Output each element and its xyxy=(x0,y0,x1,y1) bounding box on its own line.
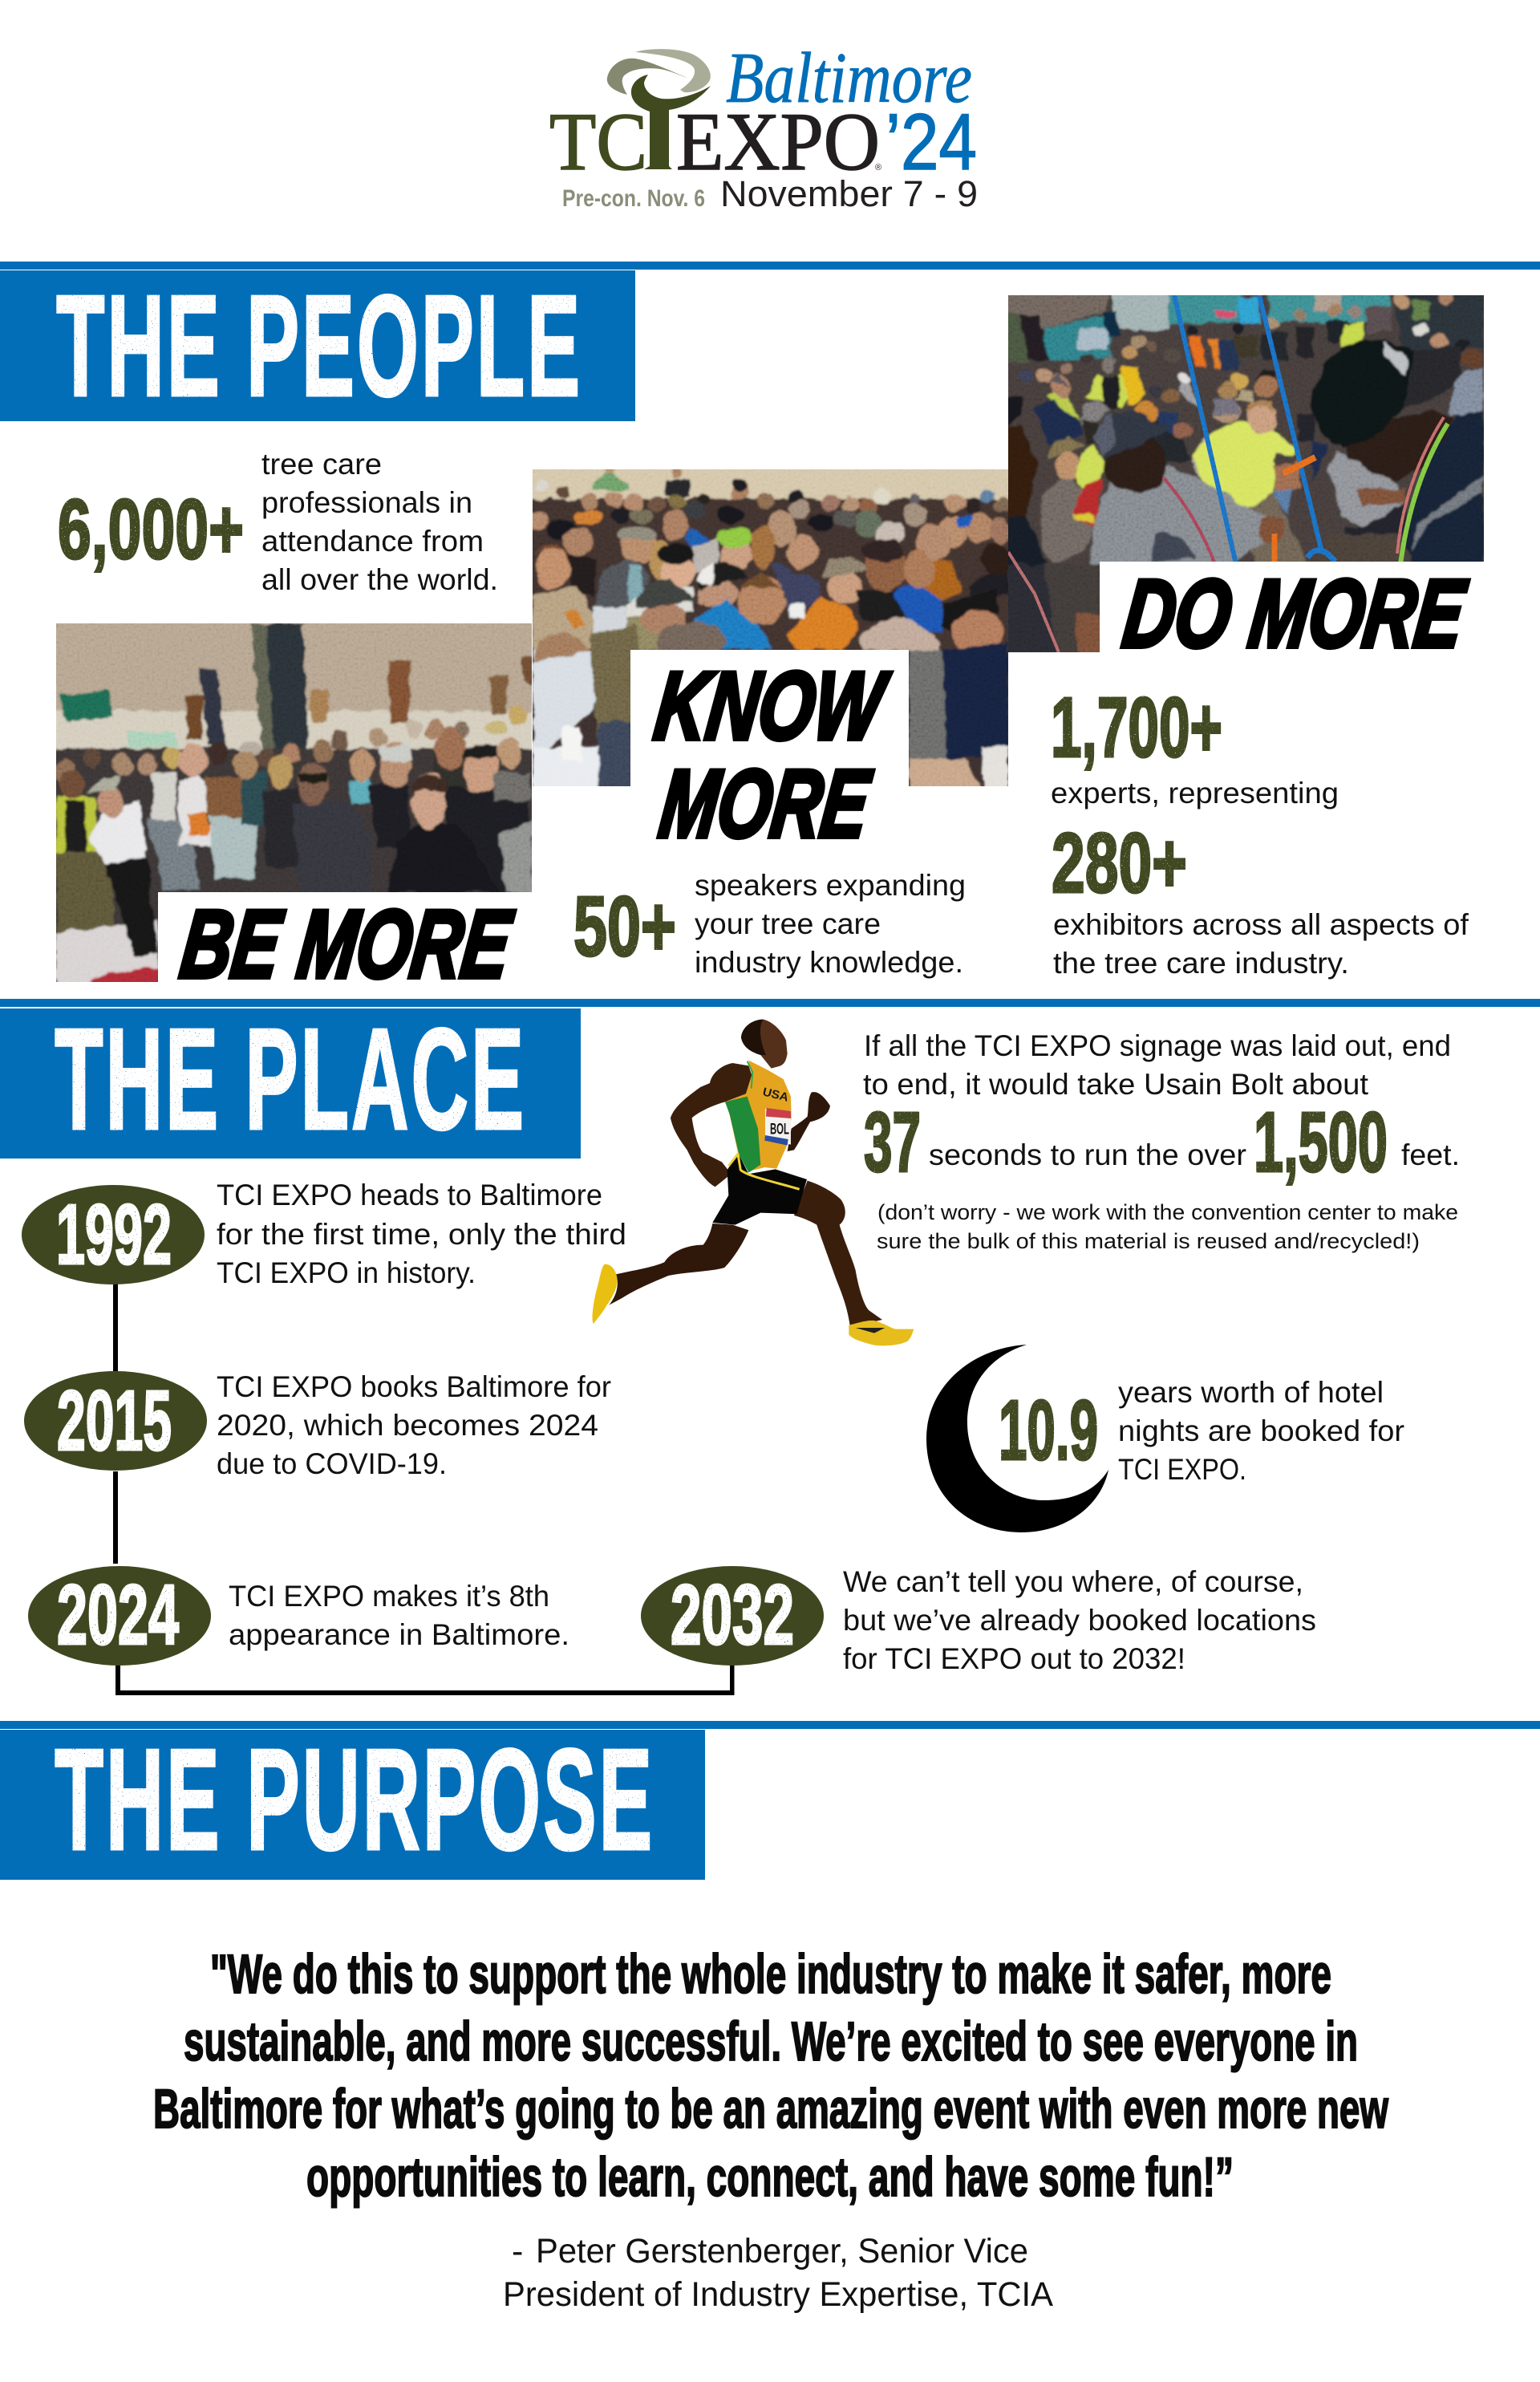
attribution: Peter Gerstenberger, Senior Vice xyxy=(536,2232,1028,2270)
text: signage intro xyxy=(863,1029,1451,1101)
text: 2024 xyxy=(229,1580,569,1651)
text: signage intro: to end, it would take Usain Bolt about xyxy=(863,1068,1369,1101)
logo: TCI EXPO '24 Baltimore: ® xyxy=(875,163,881,172)
text: hotel nights xyxy=(1118,1376,1404,1486)
text: attendance: attendance from xyxy=(261,525,484,558)
timeline node: 1992 xyxy=(22,1185,205,1284)
stat: 50+: 50+ xyxy=(573,879,676,974)
text: hotel nights: TCI EXPO. xyxy=(1118,1453,1246,1486)
text: 1992: TCI EXPO heads to Baltimore xyxy=(217,1179,602,1211)
text: exhibitors: the tree care industry. xyxy=(1053,947,1349,980)
photo: attendees in seminar xyxy=(533,469,1008,786)
timeline node: 2015: 2015 xyxy=(57,1374,172,1468)
image: sprinter running: USA xyxy=(761,1085,790,1105)
note: recycled: (don’t worry - we work with the convention center to make xyxy=(877,1200,1458,1224)
text: speakers: industry knowledge. xyxy=(695,946,963,979)
text: 2032: for TCI EXPO out to 2032! xyxy=(843,1642,1185,1675)
stat: 1,700+: 1,700+ xyxy=(1051,680,1222,775)
logo: TCI EXPO '24 Baltimore: TC xyxy=(549,96,647,188)
attribution: President of Industry Expertise, TCIA xyxy=(503,2275,1053,2314)
text: attendance xyxy=(261,448,498,596)
heading: the purpose: THE PURPOSE xyxy=(55,1719,654,1881)
text: 1992 xyxy=(217,1179,626,1289)
image: sprinter running: BOL xyxy=(770,1121,789,1138)
logo: TCI EXPO '24 Baltimore: Pre-con. Nov. 6 xyxy=(562,185,705,212)
heading: the place: THE PLACE xyxy=(55,999,526,1160)
text: 1992: TCI EXPO in history. xyxy=(217,1256,476,1289)
panel: the people xyxy=(0,262,1540,998)
heading: the place xyxy=(0,999,581,1160)
attribution: - xyxy=(512,2232,523,2270)
stat: 6,000+: 6,000+ xyxy=(58,482,244,577)
text: 2015: TCI EXPO books Baltimore for xyxy=(217,1370,611,1403)
callout: know more: MORE xyxy=(654,749,877,858)
timeline node: 2015 xyxy=(24,1371,207,1471)
timeline node: 2024: 2024 xyxy=(57,1568,179,1662)
note: recycled: sure the bulk of this material is reused and/recycled!) xyxy=(877,1229,1420,1253)
text: 2015 xyxy=(217,1370,611,1480)
heading: the people xyxy=(0,266,635,427)
panel: the purpose xyxy=(0,1719,1540,2314)
photo: crowd in exhibit hall xyxy=(56,623,532,982)
quote xyxy=(153,1943,1388,2208)
logo: TCI EXPO '24 Baltimore: ’24 xyxy=(886,97,977,186)
text: hotel nights: years worth of hotel xyxy=(1118,1376,1384,1409)
logo: TCI EXPO '24 Baltimore: Baltimore xyxy=(726,39,972,118)
text: feet: feet. xyxy=(1401,1138,1460,1171)
text: attendance: professionals in xyxy=(261,486,472,519)
text: experts: experts, representing xyxy=(1051,777,1339,810)
panel: the place xyxy=(0,999,1540,1695)
text: 2032: but we’ve already booked locations xyxy=(843,1604,1316,1637)
timeline node: 2032 xyxy=(641,1566,824,1666)
logo: TCI EXPO '24 Baltimore: November 7 - 9 xyxy=(720,173,978,214)
callout: be more: BE MORE xyxy=(176,890,518,998)
callout: know more xyxy=(630,650,909,858)
text: speakers: speakers expanding xyxy=(695,869,966,902)
stat: 10.9: 10.9 xyxy=(999,1383,1098,1478)
attribution xyxy=(503,2232,1053,2314)
text: 2032: We can’t tell you where, of course, xyxy=(843,1565,1303,1598)
callout: know more: KNOW xyxy=(650,651,894,760)
text: 1992: for the first time, only the third xyxy=(217,1218,626,1251)
timeline node: 2024 xyxy=(28,1566,211,1666)
logo: TCI EXPO '24 Baltimore xyxy=(549,39,978,214)
text: 2024: appearance in Baltimore. xyxy=(229,1618,569,1651)
heading: the people: THE PEOPLE xyxy=(56,266,582,427)
text: exhibitors: exhibitors across all aspects of xyxy=(1053,908,1469,941)
stat: 37: 37 xyxy=(864,1095,921,1190)
stat: 1,500: 1,500 xyxy=(1254,1095,1388,1190)
text: seconds: seconds to run the over xyxy=(929,1138,1246,1171)
text: attendance: tree care xyxy=(261,448,382,481)
text: 2015: due to COVID-19. xyxy=(217,1447,447,1480)
timeline node: 2032: 2032 xyxy=(671,1568,794,1662)
logo: TCI EXPO '24 Baltimore: EXPO xyxy=(676,96,880,188)
text: 2032 xyxy=(843,1565,1316,1675)
heading: the purpose xyxy=(0,1719,705,1881)
text: attendance: all over the world. xyxy=(261,563,498,596)
text: 2024: TCI EXPO makes it’s 8th xyxy=(229,1580,549,1613)
stat: 280+: 280+ xyxy=(1052,816,1187,911)
text: signage intro: If all the TCI EXPO signage was laid out, end xyxy=(864,1029,1451,1062)
text: hotel nights: nights are booked for xyxy=(1118,1414,1404,1447)
text: exhibitors xyxy=(1053,908,1469,980)
text: 2015: 2020, which becomes 2024 xyxy=(217,1409,598,1442)
photo: climbers with ropes xyxy=(996,285,1497,660)
text: speakers xyxy=(695,869,966,979)
timeline node: 1992: 1992 xyxy=(56,1187,172,1282)
image: sprinter running xyxy=(593,1020,914,1345)
icon: crescent moon xyxy=(926,1345,1108,1532)
note: recycled xyxy=(877,1200,1458,1253)
timeline connectors xyxy=(113,1282,735,1695)
text: speakers: your tree care xyxy=(695,907,881,940)
